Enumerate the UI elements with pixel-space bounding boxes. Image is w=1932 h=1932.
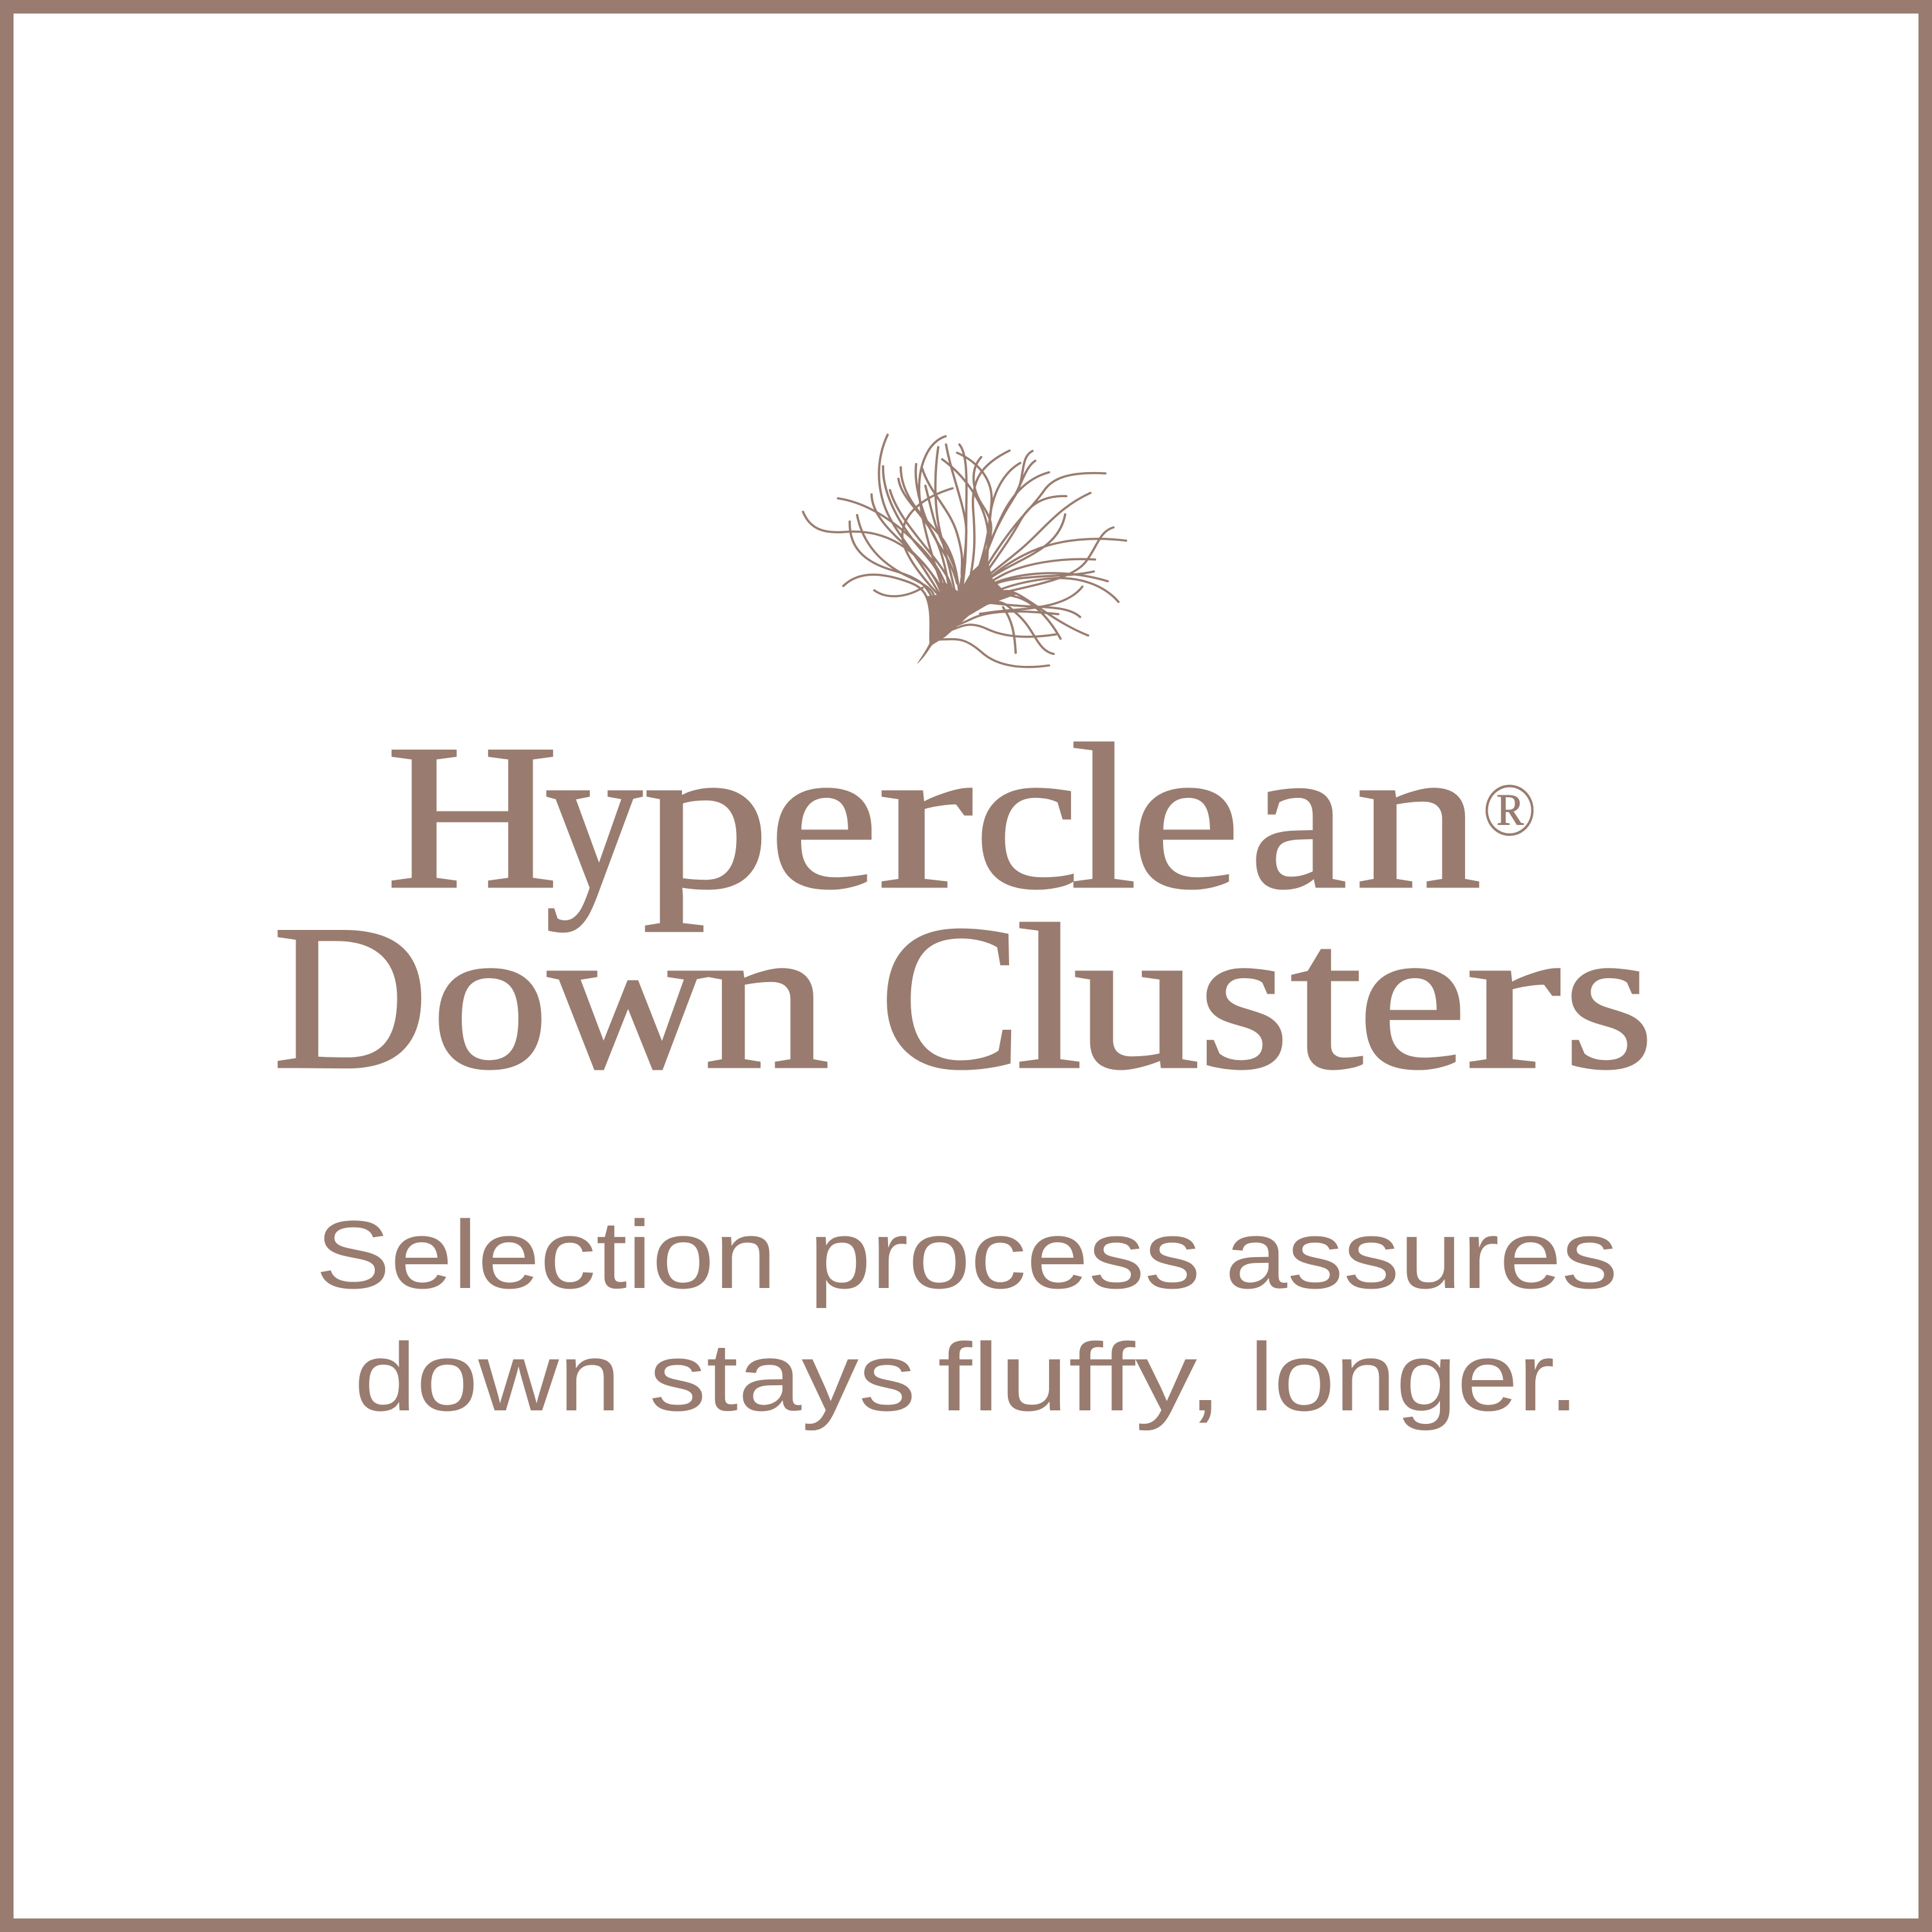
icon: down cluster feather	[803, 435, 1126, 667]
subtitle line 1: process	[809, 1200, 1200, 1309]
title line 2: r	[1465, 882, 1562, 1112]
title line 1: H	[386, 701, 559, 932]
title line 2: u	[1073, 882, 1200, 1112]
title line 1: ®	[1482, 768, 1537, 852]
title line 2: o	[431, 882, 549, 1112]
subtitle line 1: assures	[1225, 1200, 1618, 1309]
title line 1: c	[974, 701, 1080, 932]
title line 1: p	[642, 701, 770, 933]
title line 1: n	[1355, 701, 1482, 932]
title line 2: s	[1198, 882, 1290, 1112]
title line 2: e	[1357, 882, 1468, 1112]
title line 1: y	[545, 701, 643, 933]
title line 1: l	[1070, 701, 1137, 932]
subtitle	[316, 1200, 1618, 1431]
title line 1: r	[877, 701, 974, 932]
title line 2: w	[547, 882, 708, 1112]
title line 2: C	[879, 882, 1022, 1112]
subtitle line 2: stays	[649, 1323, 916, 1431]
title line 2: s	[1563, 882, 1654, 1112]
title line 1: e	[1130, 701, 1241, 932]
subtitle line 1: Selection	[316, 1200, 777, 1309]
title line 2: D	[272, 882, 429, 1112]
title line 1: e	[768, 701, 879, 932]
title line 2: l	[1016, 882, 1083, 1112]
title line 2: n	[703, 882, 830, 1112]
subtitle line 2: longer.	[1249, 1323, 1579, 1431]
subtitle line 2: fluffy,	[938, 1323, 1222, 1431]
title line 2: t	[1290, 882, 1364, 1112]
title: Hyperclean Down Clusters	[272, 701, 1654, 1112]
subtitle line 2: down	[354, 1323, 621, 1431]
title line 1: a	[1249, 701, 1347, 932]
